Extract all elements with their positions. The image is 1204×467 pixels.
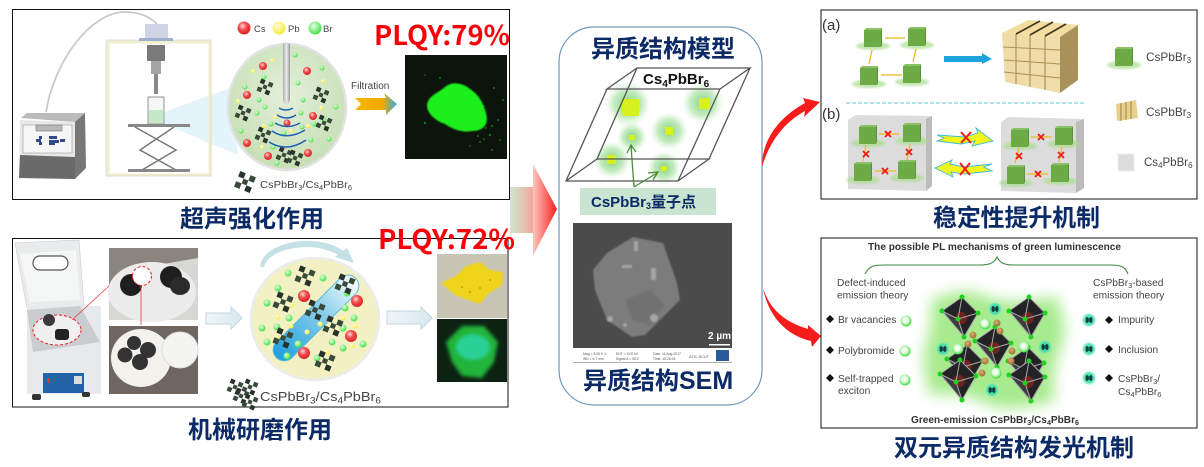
label: CsPbBr3/Cs4PbBr6: CsPbBr (260, 179, 296, 191)
arrow: filtration: Filtration (351, 81, 389, 92)
label: CsPbBr3/Cs4PbBr6: PbBr (323, 179, 348, 191)
icon: ultrasonic controller (19, 12, 157, 179)
image: yellow powder (437, 254, 507, 318)
panel: stability (821, 10, 1197, 199)
arrow: disc to product (387, 307, 432, 329)
legend: stability: CsPbBr (1146, 105, 1187, 119)
panel: ultrasonic enhancement (12, 10, 510, 200)
part b: matrix protected: (b) (822, 106, 840, 123)
legend: stability: Cs (1144, 157, 1158, 169)
image: SEM micrograph: Mag = 5.00 K X (583, 352, 607, 356)
text: CsPbBr3 theory: CsPbBr (1093, 278, 1128, 289)
text: defect theory: Defect-induced (837, 278, 906, 289)
image: SEM micrograph: EHT = 5.00 kV (616, 352, 639, 356)
text: defect theory (837, 278, 909, 302)
legend: stability: 3 (1187, 111, 1192, 120)
image: SEM micrograph: 2 µm (708, 331, 731, 342)
list: CsPbBr3 items: 3 (1153, 377, 1157, 386)
label: CsPbBr3/Cs4PbBr6: 4 (319, 185, 323, 192)
label: CsPbBr3/Cs4PbBr6: /Cs (302, 179, 319, 191)
text: CsPbBr3 theory (1093, 278, 1165, 302)
list: defect-induced items: exciton (838, 386, 870, 397)
list: CsPbBr3 items (1082, 312, 1161, 399)
label: quantum dots: 3 (646, 201, 651, 211)
arrow: red down (763, 288, 821, 347)
diagram: heterostructure luminescence (924, 292, 1064, 408)
heading: PL mechanisms: The possible PL mechanisms of green luminescence (868, 242, 1122, 253)
panel: heterostructure (559, 27, 762, 405)
text: CsPbBr3 theory: 3 (1128, 281, 1132, 290)
image: SEM micrograph: ATIC-SCUT (689, 355, 710, 359)
label: quantum dots (580, 188, 716, 215)
heading: luminescence: 双元异质结构发光机制 (894, 435, 1134, 462)
image: SEM micrograph: Signal A = SE2 (616, 357, 639, 361)
stat: PLQY 72: PLQY:72% (378, 218, 515, 257)
legend: stability: 4 (1158, 161, 1163, 170)
label: CsPbBr3/Cs4PbBr6 (234, 171, 352, 193)
heading: grinding: 机械研磨作用 (188, 417, 332, 444)
caption: green emission: 4 (1047, 420, 1051, 427)
list: defect-induced items: Br vacancies (838, 315, 896, 326)
caption: green emission: Green-emission CsPbBr (911, 415, 1026, 426)
label: CsPbBr3/Cs4PbBr6 grinding: PbBr (343, 389, 376, 404)
caption: green emission: PbBr (1051, 415, 1075, 426)
list: CsPbBr3 items: Impurity (1118, 315, 1155, 326)
image: SEM micrograph: WD = 6.7 mm (583, 357, 604, 361)
list: CsPbBr3 items: Inclusion (1118, 345, 1158, 356)
panel: mechanical grinding (12, 218, 515, 410)
arrow: red up (762, 98, 820, 167)
image: grinding jar photos (72, 248, 198, 394)
label: CsPbBr3/Cs4PbBr6 grinding: 6 (375, 396, 381, 406)
label: CsPbBr3/Cs4PbBr6 grinding: 3 (310, 396, 316, 406)
label: CsPbBr3/Cs4PbBr6 grinding (227, 379, 381, 410)
diagram: Cs4PbBr6 crystal (566, 68, 750, 187)
list: CsPbBr3 items: 6 (1157, 390, 1161, 399)
image: SEM micrograph: Date: 11 Aug 2017 (653, 352, 681, 356)
legend: elements: Cs (254, 24, 266, 35)
label: quantum dots: 量子点 (651, 193, 696, 211)
label: CsPbBr3/Cs4PbBr6 grinding: /Cs (316, 389, 338, 404)
image: green powder (437, 319, 507, 382)
text: CsPbBr3 theory: emission theory (1093, 290, 1165, 302)
diagram: grinding disc (251, 241, 379, 380)
legend: elements: Pb (288, 24, 300, 35)
legend: stability (1107, 47, 1193, 171)
diagram: Cs4PbBr6 crystal: PbBr (668, 71, 704, 88)
list: defect-induced items: Self-trapped (838, 374, 894, 385)
legend: elements: Br (323, 24, 332, 35)
diagram: reaction disc (228, 42, 346, 170)
part a: aggregation: (a) (822, 17, 840, 34)
part a: aggregation (822, 17, 1078, 93)
caption: green emission: /Cs (1031, 415, 1047, 426)
icon: large cube (1002, 20, 1078, 93)
arrow: gradient center (510, 164, 557, 256)
legend: stability: 3 (1187, 56, 1192, 65)
legend: elements (238, 22, 332, 35)
list: CsPbBr3 items: CsPbBr (1118, 374, 1153, 385)
text: defect theory: emission theory (837, 290, 909, 302)
heading: model: 异质结构模型 (591, 36, 735, 63)
label: CsPbBr3/Cs4PbBr6 grinding: CsPbBr (260, 389, 305, 404)
list: defect-induced items (826, 315, 912, 397)
image: SEM micrograph (573, 223, 732, 363)
text: CsPbBr3 theory: -based (1132, 278, 1164, 289)
image: green luminescent powder (405, 55, 507, 159)
arrow: filtration (351, 81, 397, 115)
panel: PL mechanism (821, 238, 1197, 428)
list: CsPbBr3 items: Cs (1118, 387, 1130, 398)
part b: matrix protected (822, 106, 1084, 193)
arrow: machine to disc (206, 307, 242, 329)
diagram: Cs4PbBr6 crystal: Cs (643, 71, 662, 88)
legend: stability: 6 (1188, 161, 1193, 170)
legend: stability: PbBr (1163, 157, 1188, 169)
heading: stability: 稳定性提升机制 (933, 205, 1100, 232)
list: CsPbBr3 items: PbBr (1135, 387, 1158, 398)
stat: PLQY 79: PLQY:79% (374, 14, 510, 53)
list: CsPbBr3 items: 4 (1130, 390, 1135, 399)
list: CsPbBr3 items: / (1157, 374, 1160, 385)
heading: SEM: 异质结构SEM (583, 367, 733, 395)
icon: sonication stand (106, 24, 238, 176)
diagram: Cs4PbBr6 crystal: 6 (704, 79, 710, 90)
list: defect-induced items: Polybromide (838, 346, 895, 357)
label: quantum dots: CsPbBr (591, 194, 646, 211)
diagram: Cs4PbBr6 crystal: 4 (662, 79, 668, 90)
brace (865, 257, 1128, 274)
label: CsPbBr3/Cs4PbBr6: 3 (298, 185, 302, 192)
legend: stability: CsPbBr (1146, 50, 1187, 64)
label: CsPbBr3/Cs4PbBr6: 6 (348, 185, 352, 192)
image: grinding machine (15, 240, 101, 400)
caption: green emission: 6 (1075, 420, 1079, 427)
image: SEM micrograph: Time: 15:26:02 (653, 357, 676, 361)
label: CsPbBr3/Cs4PbBr6 grinding: 4 (337, 396, 343, 406)
caption: green emission: 3 (1027, 420, 1031, 427)
heading: ultrasonic: 超声强化作用 (180, 206, 324, 233)
